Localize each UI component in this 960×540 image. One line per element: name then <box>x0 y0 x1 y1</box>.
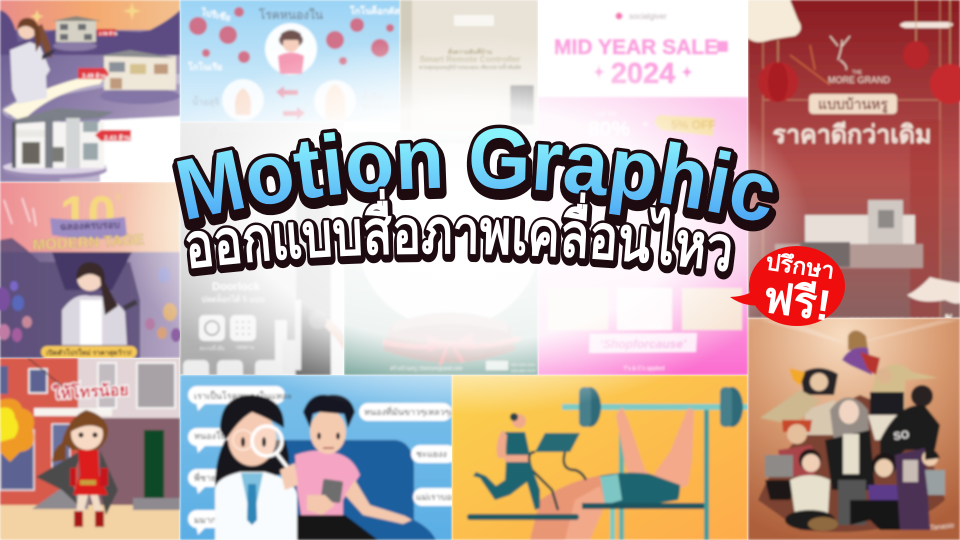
panel: mid year sale: + <box>642 117 649 131</box>
sparkle <box>30 2 141 23</box>
hat guy <box>800 368 840 435</box>
top woman <box>842 330 880 375</box>
product thumbs <box>566 316 608 330</box>
signature: Tanasio <box>929 522 954 532</box>
smiling woman <box>785 449 838 531</box>
panel: red lunar new year house: MORE GRAND <box>828 75 891 85</box>
panel: ten year anniversary: เปิดตัวโปรใหม่ ราคาสุดว้าว! <box>46 348 132 357</box>
autumn tree <box>0 399 34 462</box>
bench <box>467 514 579 520</box>
panel: disease diagram: น้ำใน <box>361 90 384 102</box>
panel: ten year anniversary <box>0 182 181 358</box>
patient circle <box>265 23 317 75</box>
panel: houses: 2.43 ล้าน <box>104 133 131 142</box>
treadmill and runner <box>535 433 580 452</box>
code: Use code <box>625 321 663 331</box>
subtitle: Thai: ออกแบบสื่อภาพเคลื่อนไหว <box>184 186 731 272</box>
panel: mid year sale: 5% OFF <box>671 118 716 132</box>
house <box>805 215 915 265</box>
panel: disease diagram: โกโนเรีย <box>187 61 222 72</box>
houses <box>53 41 97 51</box>
panel: mid year sale: socialgiver <box>629 12 667 21</box>
bubble captions: แม่เราบอกว่ <box>416 492 462 502</box>
remote caption: สั่งความฝันที่บ้าน <box>448 47 493 56</box>
balloons <box>0 267 181 342</box>
panel: digital doorlock: สแกนนิ้วมือ <box>199 343 225 352</box>
brand <box>830 36 850 70</box>
panel: smart remote: Smart Remote Controller <box>420 54 521 64</box>
diagram labels: โรคหนองใน <box>258 7 324 22</box>
panel: superhero building <box>0 358 180 540</box>
bubble captions: หนองที่มันขาวๆเหลวๆเหร <box>364 405 463 417</box>
panel: smart remote <box>400 0 538 132</box>
ribbon <box>50 217 127 239</box>
panel: gym <box>452 375 748 540</box>
bubble captions: มมาก <box>194 515 216 525</box>
callout: free consultation: ฟรี! <box>760 274 834 331</box>
panel: ten year anniversary: ปี <box>116 194 121 202</box>
caption: red call-out: ให้โทรน้อย <box>52 379 129 403</box>
firework <box>789 44 831 86</box>
panel: digital doorlock <box>180 122 344 380</box>
panel: houses <box>0 0 180 182</box>
purple shirt guy <box>850 453 906 530</box>
doctor <box>215 395 298 540</box>
panel: digital doorlock: ทำไง <box>240 145 273 164</box>
bubble captions: หนองใน <box>194 431 226 441</box>
panel: red lunar new year house: แบบบ้านหรู <box>818 96 888 113</box>
man <box>290 395 412 540</box>
doorlock captions: ลืมกุญแจเปิด <box>208 126 303 147</box>
woman <box>34 24 52 58</box>
panel: mid year sale: ‘Shopforcause’ <box>600 337 687 351</box>
panel: snow globe: The More Grand Presents <box>411 139 469 145</box>
panel: houses: 2.58 ล้าน <box>99 30 118 36</box>
center woman <box>825 398 875 525</box>
hoodie man: SO <box>893 429 911 443</box>
panel: digital doorlock: Doorlock <box>212 281 261 293</box>
guy with laptop <box>765 420 815 500</box>
anniversary number: 10 <box>60 186 116 242</box>
panel: houses: 3.49 ล้าน <box>82 72 107 80</box>
speech bubbles <box>188 386 458 535</box>
panel: mid year sale: T's & C's applied <box>624 366 664 372</box>
discount: UP TO <box>597 111 617 118</box>
panel: digital doorlock: รหัสผ่าน <box>236 345 255 351</box>
panel: red lunar new year house: THE <box>852 70 863 76</box>
panel: character group <box>748 318 960 540</box>
panel: mid year sale: 2024 <box>611 58 675 90</box>
promo pill <box>41 346 137 358</box>
callout: free consultation <box>730 246 845 331</box>
rack posts <box>619 420 624 540</box>
title: Motion Graphic: Motion Graphic <box>174 124 773 220</box>
panel: disease diagram: ช่องคลอด <box>361 101 400 111</box>
bubble captions: ชะแยงง <box>416 449 447 459</box>
brand <box>616 12 622 20</box>
panel: snow globe: 065-889-9040 <box>511 368 537 373</box>
panel: red lunar new year house: จำนวนจำกัด 5 หลังเท่านั้น <box>846 330 959 344</box>
bubble captions <box>194 389 463 525</box>
bench lifter legs <box>616 407 655 500</box>
hero character <box>36 450 82 505</box>
panel: disease diagram <box>180 0 400 122</box>
fire <box>789 368 805 386</box>
sofa <box>285 440 436 540</box>
panel: mid year sale <box>538 0 748 375</box>
barbell <box>562 404 748 410</box>
subtitle: Thai: ออกแบบสื่อภาพเคลื่อนไหว <box>184 189 736 280</box>
panel: ten year anniversary: ฉลองครบรอบ <box>60 220 120 233</box>
feature icons <box>199 315 225 341</box>
bubble captions: เราเป็นโรคหนองในแหละ <box>194 389 292 401</box>
panel: red lunar new year house <box>748 0 960 344</box>
footer text: ทุกแบบ ทุกหลัง <box>850 313 960 333</box>
pathogen cluster <box>189 7 394 65</box>
panel: snow globe <box>344 264 538 375</box>
panel: mid year sale: 80% <box>588 118 630 141</box>
hoodie man <box>880 385 940 475</box>
lanterns <box>758 62 798 102</box>
gold frame <box>763 0 940 318</box>
callout: free consultation: ปรึกษา <box>764 248 836 284</box>
panel: doctor and patient <box>180 375 463 540</box>
panel: smart remote: ควบคุมอุณหภูมิบ้านของคุณ เพียงปลายนิ้วสัมผัส <box>419 62 522 72</box>
arcade machine <box>895 448 945 530</box>
panel: digital doorlock: ปลดล็อกได้ 5 แบบ <box>201 293 265 304</box>
house structure <box>760 390 820 425</box>
panel: disease diagram: ไปริเซีย <box>200 6 232 23</box>
panel: disease diagram: โกโนค็อกคัส <box>349 4 400 16</box>
woman <box>62 295 127 345</box>
bubble captions: พี่ชายคุ <box>194 471 222 484</box>
panel: ten year anniversary: MODERN TAGE <box>32 231 144 254</box>
heading: ราคาดีกว่าเดิม <box>773 121 931 149</box>
blonde <box>868 364 938 440</box>
white center vignette <box>120 35 810 415</box>
footer contact: สร้างบ้านหรู | themoregrand.com <box>390 365 462 372</box>
title: Motion Graphic: Motion Graphic <box>172 132 780 232</box>
white swoosh <box>2 74 180 182</box>
panel: disease diagram: น้ำอสุจิ <box>192 95 219 108</box>
sale heading: MID YEAR SALE <box>554 36 718 59</box>
clouds <box>748 0 801 42</box>
pill label <box>809 94 897 114</box>
panel: snow globe: 061-020-2111 <box>511 362 536 367</box>
